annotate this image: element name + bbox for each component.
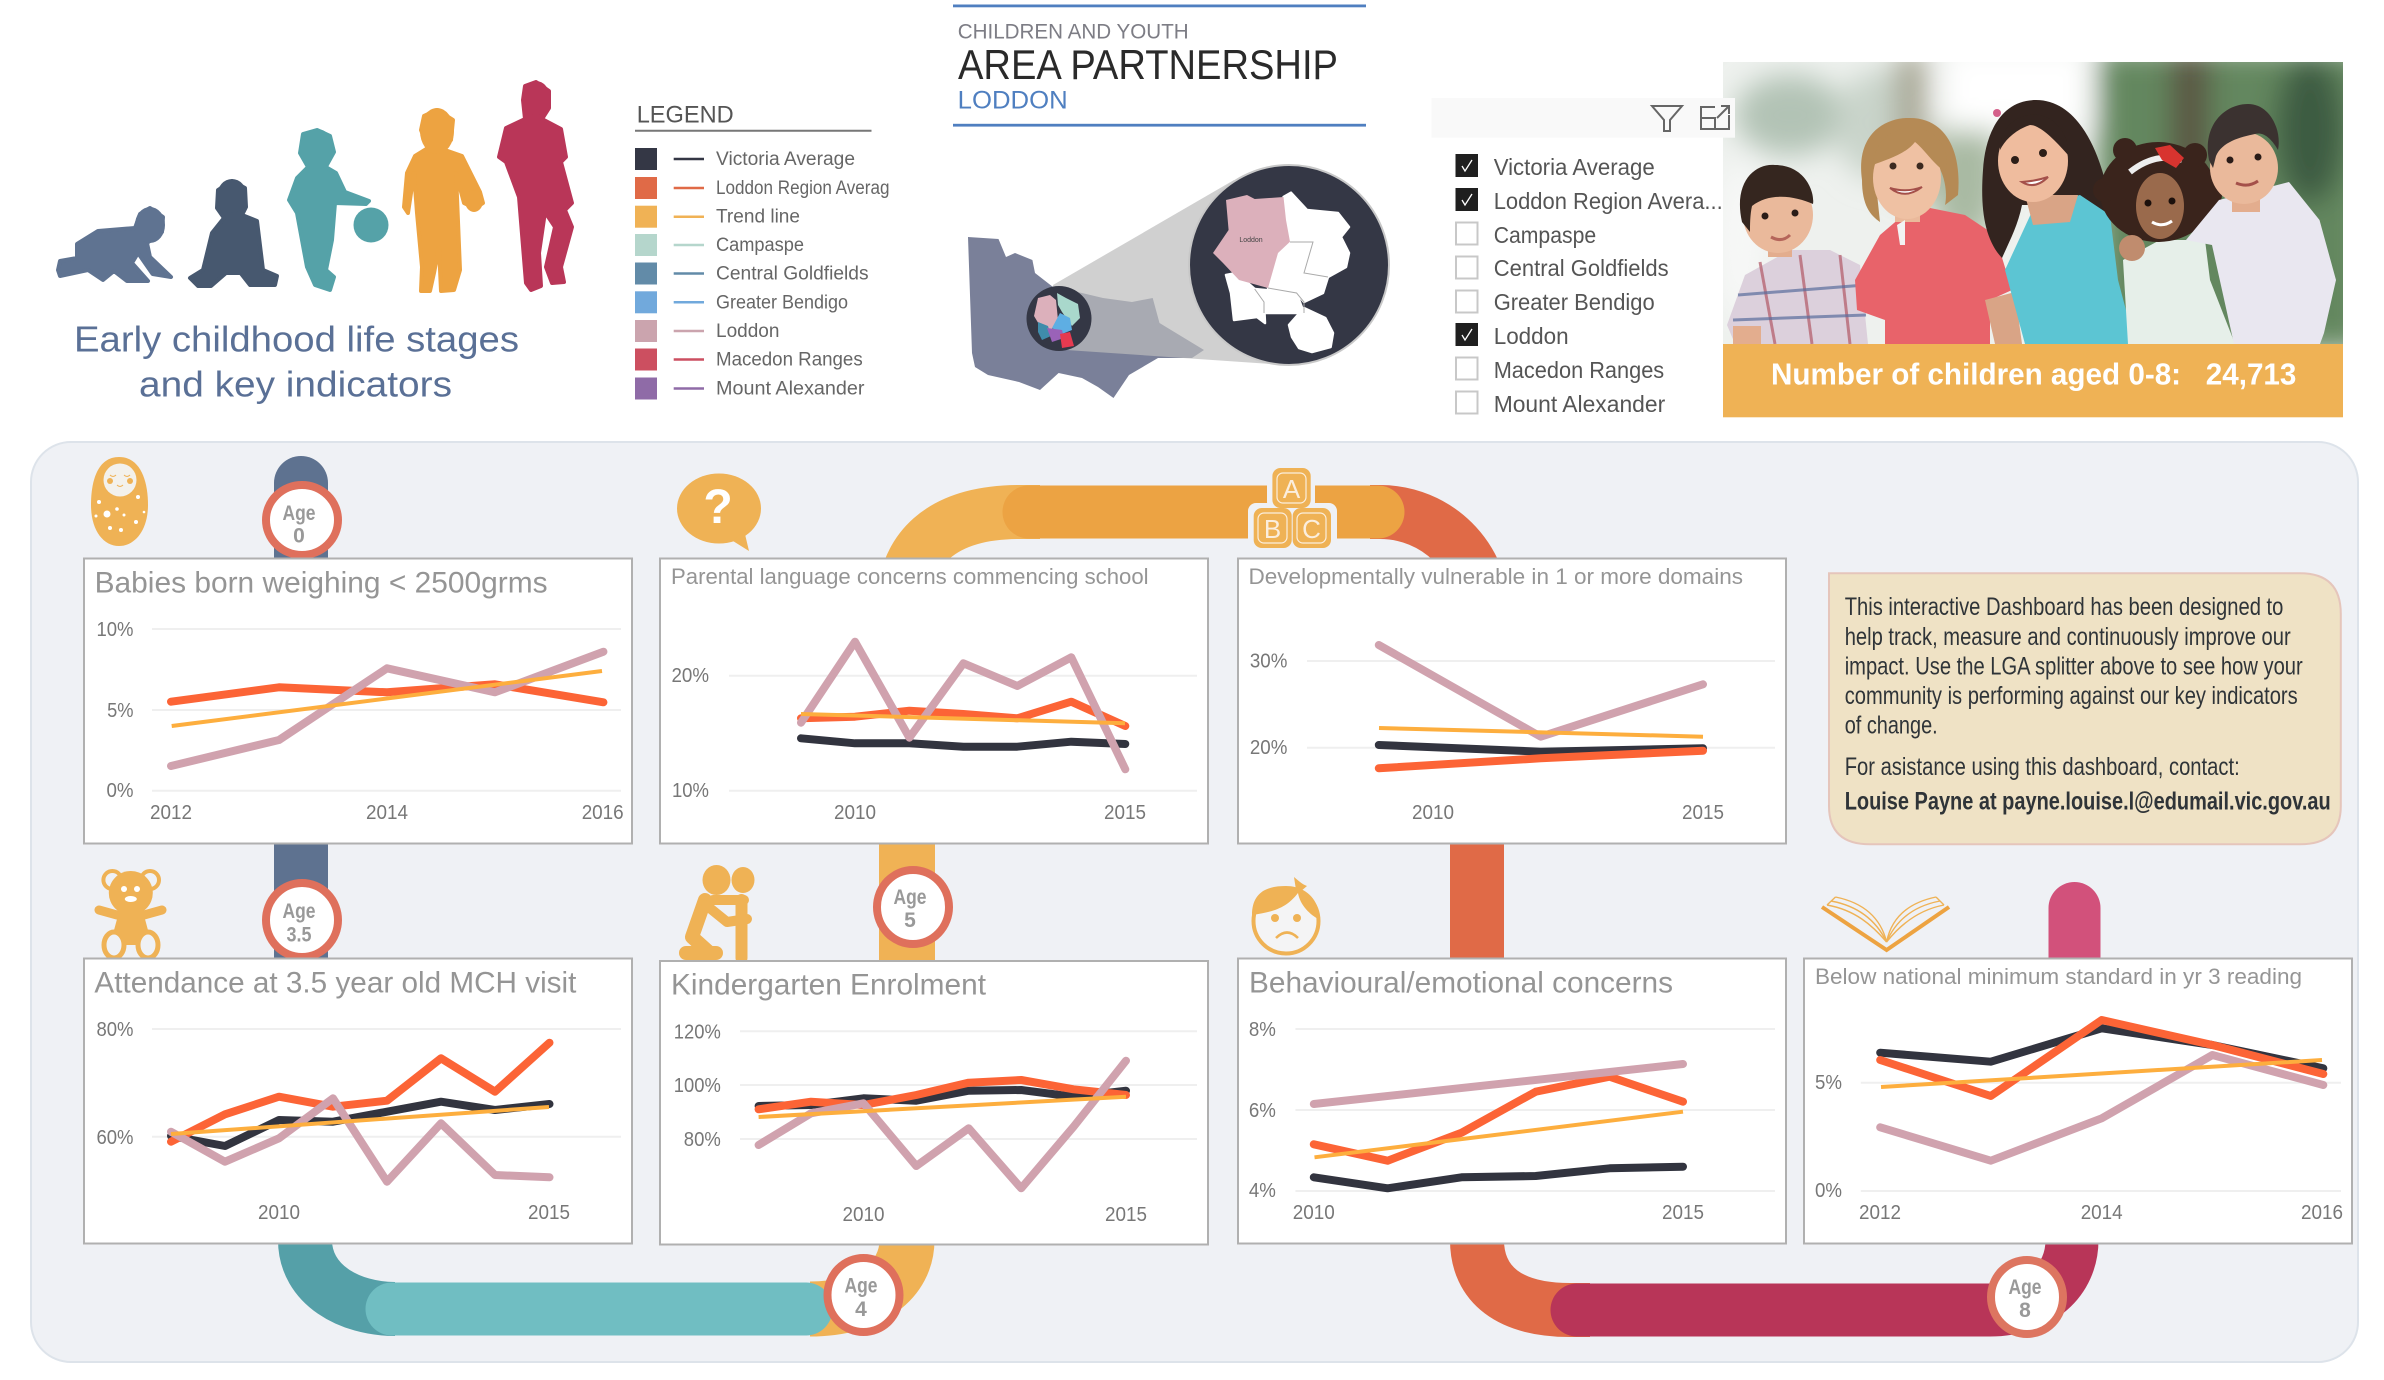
age marker: 5: 5: [904, 909, 916, 932]
timeline pipe: light orange bend at age 4: [810, 1200, 907, 1309]
chart panel: Developmentally vulnerable in 1 or more domains: 30%: [1250, 650, 1288, 672]
timeline pipe: age 0 to 3.5: [274, 483, 328, 1000]
legend row: Mount Alexander: Mount Alexander: [716, 378, 865, 400]
timeline pipe: orange vertical to age 5: [879, 820, 935, 1000]
child 1: plaid shirt boy: [1727, 165, 1868, 346]
map: magnifier beam: [1053, 180, 1286, 365]
legend row: Loddon: [635, 320, 779, 342]
map: Victoria with Loddon region magnified: [968, 165, 1389, 398]
timeline pipe: pink top at age 8 chart: [2048, 908, 2100, 1000]
line series: [1379, 645, 1703, 768]
age marker: 8: [1991, 1260, 2063, 1334]
chart panel: Attendance at 3.5 year old MCH visit: 80%: [96, 1019, 134, 1041]
chart panel: Developmentally vulnerable in 1 or more domains: 2010: [1412, 802, 1454, 824]
child 3: turquoise shirt girl: [1982, 100, 2135, 344]
age marker: 4: Age: [844, 1275, 878, 1298]
icon: focus mode: [1701, 106, 1729, 129]
logo: Children and Youth Area Partnership Loddon: AREA PARTNERSHIP: [958, 41, 1338, 88]
chart panel: Behavioural/emotional concerns: 8%: [1249, 1019, 1276, 1041]
chart panel: Attendance at 3.5 year old MCH visit: [84, 958, 632, 1244]
age marker: 0: Age: [282, 502, 316, 525]
timeline pipe: orange left bend at top: [903, 512, 1040, 810]
age marker: 3.5: [266, 883, 338, 957]
timeline pipe: red-orange right bend and vertical: [1370, 512, 1484, 1000]
legend row: Central Goldfields: [635, 262, 869, 284]
chart panel: Behavioural/emotional concerns: 2015: [1662, 1202, 1704, 1224]
line series: [171, 1043, 550, 1182]
chart title: Parental language concerns commencing school: [671, 564, 1149, 589]
age marker: 4: 4: [855, 1298, 867, 1321]
info box: dashboard note: This interactive Dashboard has been designed to: [1845, 593, 2283, 621]
chart panel: Parental language concerns commencing school: 2015: [1104, 802, 1146, 824]
silhouette: sitting toddler: [190, 179, 277, 286]
banner: number of children: [1723, 344, 2343, 417]
map: small inset circle: [1026, 286, 1092, 351]
icon: kneeling adult hugging child: [686, 865, 754, 958]
slicer row: Central Goldfields: Central Goldfields: [1494, 255, 1669, 281]
icon: ABC blocks: B: [1264, 514, 1281, 544]
banner: number of children: Number of children aged 0-8: 24,713: [1771, 356, 2296, 391]
chart panel: Kindergarten Enrolment: 120%: [674, 1022, 721, 1044]
chart panel: Babies born weighing under 2500grms: 2016: [582, 802, 624, 824]
slicer row: Loddon: Loddon: [1494, 323, 1569, 349]
legend row: Mount Alexander: [635, 378, 865, 400]
legend row: Victoria Average: Victoria Average: [716, 149, 855, 170]
chart panel: Babies born weighing under 2500grms: 2014: [366, 802, 408, 824]
photo: five children standing together: [1723, 62, 2343, 344]
chart panel: Below national minimum standard in yr 3 reading: 0%: [1815, 1180, 1842, 1202]
slicer row: Greater Bendigo: Greater Bendigo: [1494, 289, 1655, 315]
map: enlarged circle with local government areas: Loddon: [1239, 237, 1263, 244]
slicer row: Macedon Ranges: Macedon Ranges: [1494, 357, 1664, 383]
line series: [171, 652, 603, 766]
chart panel: Behavioural/emotional concerns: 6%: [1249, 1100, 1276, 1122]
line series: [759, 1061, 1126, 1188]
chart panel: Behavioural/emotional concerns: 4%: [1249, 1180, 1276, 1202]
silhouette: crawling baby: [58, 207, 171, 281]
chart panel: Parental language concerns commencing school: [660, 558, 1208, 844]
timeline pipe: teal bend: [305, 1200, 395, 1309]
info box: dashboard note: [1829, 573, 2341, 844]
slicer row: Campaspe: Campaspe: [1494, 222, 1596, 248]
chart title: Behavioural/emotional concerns: [1249, 967, 1673, 1000]
chart panel: Parental language concerns commencing school: 20%: [672, 665, 709, 687]
legend row: Macedon Ranges: [635, 348, 863, 370]
panel: dashboard background: [31, 442, 2358, 1362]
legend row: Campaspe: Campaspe: [716, 235, 804, 256]
chart panel: Attendance at 3.5 year old MCH visit: 2010: [258, 1202, 300, 1224]
legend row: Victoria Average: [635, 148, 855, 170]
slicer row: Loddon: [1456, 323, 1569, 349]
legend row: Trend line: [635, 206, 800, 228]
chart panel: Parental language concerns commencing school: 2010: [834, 802, 876, 824]
icon: filter funnel: [1652, 106, 1682, 131]
icon: ABC blocks: C: [1302, 514, 1321, 544]
slicer row: Campaspe: [1456, 222, 1596, 248]
logo: Children and Youth Area Partnership Loddon: CHILDREN AND YOUTH: [958, 20, 1189, 43]
icon: speech bubble with question mark: [677, 474, 761, 551]
legend: [635, 102, 899, 399]
legend row: Loddon: Loddon: [716, 321, 779, 342]
age marker: 3.5: Age: [282, 900, 316, 923]
age marker: 5: Age: [894, 886, 926, 909]
slicer: LGA filter list: [1432, 98, 1735, 417]
chart title: Kindergarten Enrolment: [671, 969, 987, 1002]
chart panel: Attendance at 3.5 year old MCH visit: 2015: [528, 1202, 570, 1224]
chart panel: Kindergarten Enrolment: 80%: [684, 1129, 721, 1151]
icon: swaddled baby: [91, 457, 148, 546]
child 4: curly-haired girl: [2093, 138, 2235, 344]
chart panel: Behavioural/emotional concerns: [1238, 958, 1786, 1244]
chart panel: Below national minimum standard in yr 3 reading: 2012: [1859, 1202, 1901, 1224]
line series: [1880, 1020, 2323, 1161]
timeline pipe: orange top bar: [1029, 486, 1378, 538]
age marker: 3.5: 3.5: [286, 924, 312, 947]
legend heading: LEGEND: [637, 102, 734, 129]
legend row: Campaspe: [635, 234, 804, 256]
child 5: white shirt boy: [2119, 104, 2336, 344]
main title: Early childhood life stages: [74, 319, 519, 360]
chart panel: Babies born weighing under 2500grms: 2012: [150, 802, 192, 824]
timeline pipe: crimson bar and bend: [1577, 1200, 2072, 1310]
age marker: 0: [266, 485, 338, 555]
chart title: Attendance at 3.5 year old MCH visit: [94, 967, 577, 1000]
info box: dashboard note: For asistance using this dashboard, contact:: [1845, 753, 2240, 781]
chart title: Below national minimum standard in yr 3 reading: [1815, 964, 2302, 989]
map: Victoria outline: [968, 237, 1204, 398]
logo: Children and Youth Area Partnership Loddon: LODDON: [958, 86, 1068, 114]
chart panel: Kindergarten Enrolment: 2015: [1105, 1204, 1147, 1226]
main title: [74, 319, 519, 405]
age marker: 4: [828, 1258, 900, 1332]
icon: speech bubble with question mark: ?: [703, 481, 733, 534]
legend row: Greater Bendigo: Greater Bendigo: [716, 292, 848, 313]
line series: [801, 642, 1125, 769]
chart panel: Developmentally vulnerable in 1 or more domains: 2015: [1682, 802, 1724, 824]
icon: teddy bear: [99, 871, 162, 958]
legend row: Macedon Ranges: Macedon Ranges: [716, 350, 863, 370]
slicer header bar: [1432, 98, 1735, 138]
chart title: Developmentally vulnerable in 1 or more domains: [1248, 564, 1743, 589]
silhouettes: child life stages: [58, 81, 572, 291]
chart title: Babies born weighing < 2500grms: [95, 567, 548, 600]
legend row: Loddon Region Average: [635, 177, 899, 199]
icon: open book: [1822, 897, 1949, 950]
age marker: 8: Age: [2008, 1276, 2042, 1299]
chart panel: Parental language concerns commencing school: 10%: [672, 780, 709, 802]
chart panel: Below national minimum standard in yr 3 reading: 2014: [2081, 1202, 2123, 1224]
timeline pipe: teal bar: [392, 1282, 806, 1336]
chart panel: Developmentally vulnerable in 1 or more domains: 20%: [1250, 737, 1288, 759]
chart panel: Babies born weighing under 2500grms: 5%: [107, 700, 134, 722]
slicer row: Victoria Average: Victoria Average: [1494, 154, 1655, 180]
age marker: 8: 8: [2019, 1299, 2031, 1322]
silhouette: school child: [499, 81, 572, 290]
age marker: 0: 0: [293, 525, 305, 548]
chart panel: Kindergarten Enrolment: [660, 961, 1208, 1244]
chart panel: Below national minimum standard in yr 3 reading: 5%: [1815, 1072, 1842, 1094]
chart panel: Kindergarten Enrolment: 2010: [842, 1204, 884, 1226]
silhouette: toddler with ball: [289, 129, 388, 290]
legend row: Central Goldfields: Central Goldfields: [716, 264, 869, 284]
main title: and key indicators: [139, 364, 452, 405]
map: enlarged circle with local government areas: [1189, 165, 1389, 365]
slicer row: Loddon Region Average: Loddon Region Avera...: [1494, 188, 1723, 214]
logo: Children and Youth Area Partnership Loddon: [953, 4, 1366, 127]
chart panel: Below national minimum standard in yr 3 reading: 2016: [2301, 1202, 2343, 1224]
icon: ABC blocks: [1248, 466, 1337, 548]
timeline pipe: lower orange-red bend: [1477, 1200, 1590, 1310]
chart panel: Babies born weighing under 2500grms: 0%: [106, 780, 134, 802]
icon: sad face: [1252, 877, 1320, 954]
legend row: Greater Bendigo: [635, 291, 848, 313]
chart panel: Kindergarten Enrolment: 100%: [674, 1075, 721, 1097]
child 2: red polo boy: [1855, 118, 2022, 344]
chart panel: Babies born weighing under 2500grms: 10%: [96, 619, 134, 641]
age marker: 5: [877, 870, 949, 944]
line series: [1314, 1064, 1683, 1188]
chart panel: Babies born weighing under 2500grms: [84, 558, 632, 844]
chart panel: Attendance at 3.5 year old MCH visit: 60%: [96, 1127, 134, 1149]
chart panel: Developmentally vulnerable in 1 or more domains: [1238, 558, 1786, 844]
slicer row: Mount Alexander: Mount Alexander: [1494, 391, 1666, 417]
silhouette: preschool child: [404, 108, 483, 291]
chart panel: Below national minimum standard in yr 3 reading: [1804, 958, 2352, 1244]
legend row: Trend line: Trend line: [716, 207, 800, 228]
info box: dashboard note: of change.: [1845, 711, 1938, 739]
legend row: Loddon Region Average: Loddon Region Average: [716, 178, 899, 199]
icon: ABC blocks: A: [1283, 474, 1301, 504]
chart panel: Behavioural/emotional concerns: 2010: [1293, 1202, 1335, 1224]
info box: dashboard note: help track, measure and continuously improve our: [1845, 623, 2291, 651]
